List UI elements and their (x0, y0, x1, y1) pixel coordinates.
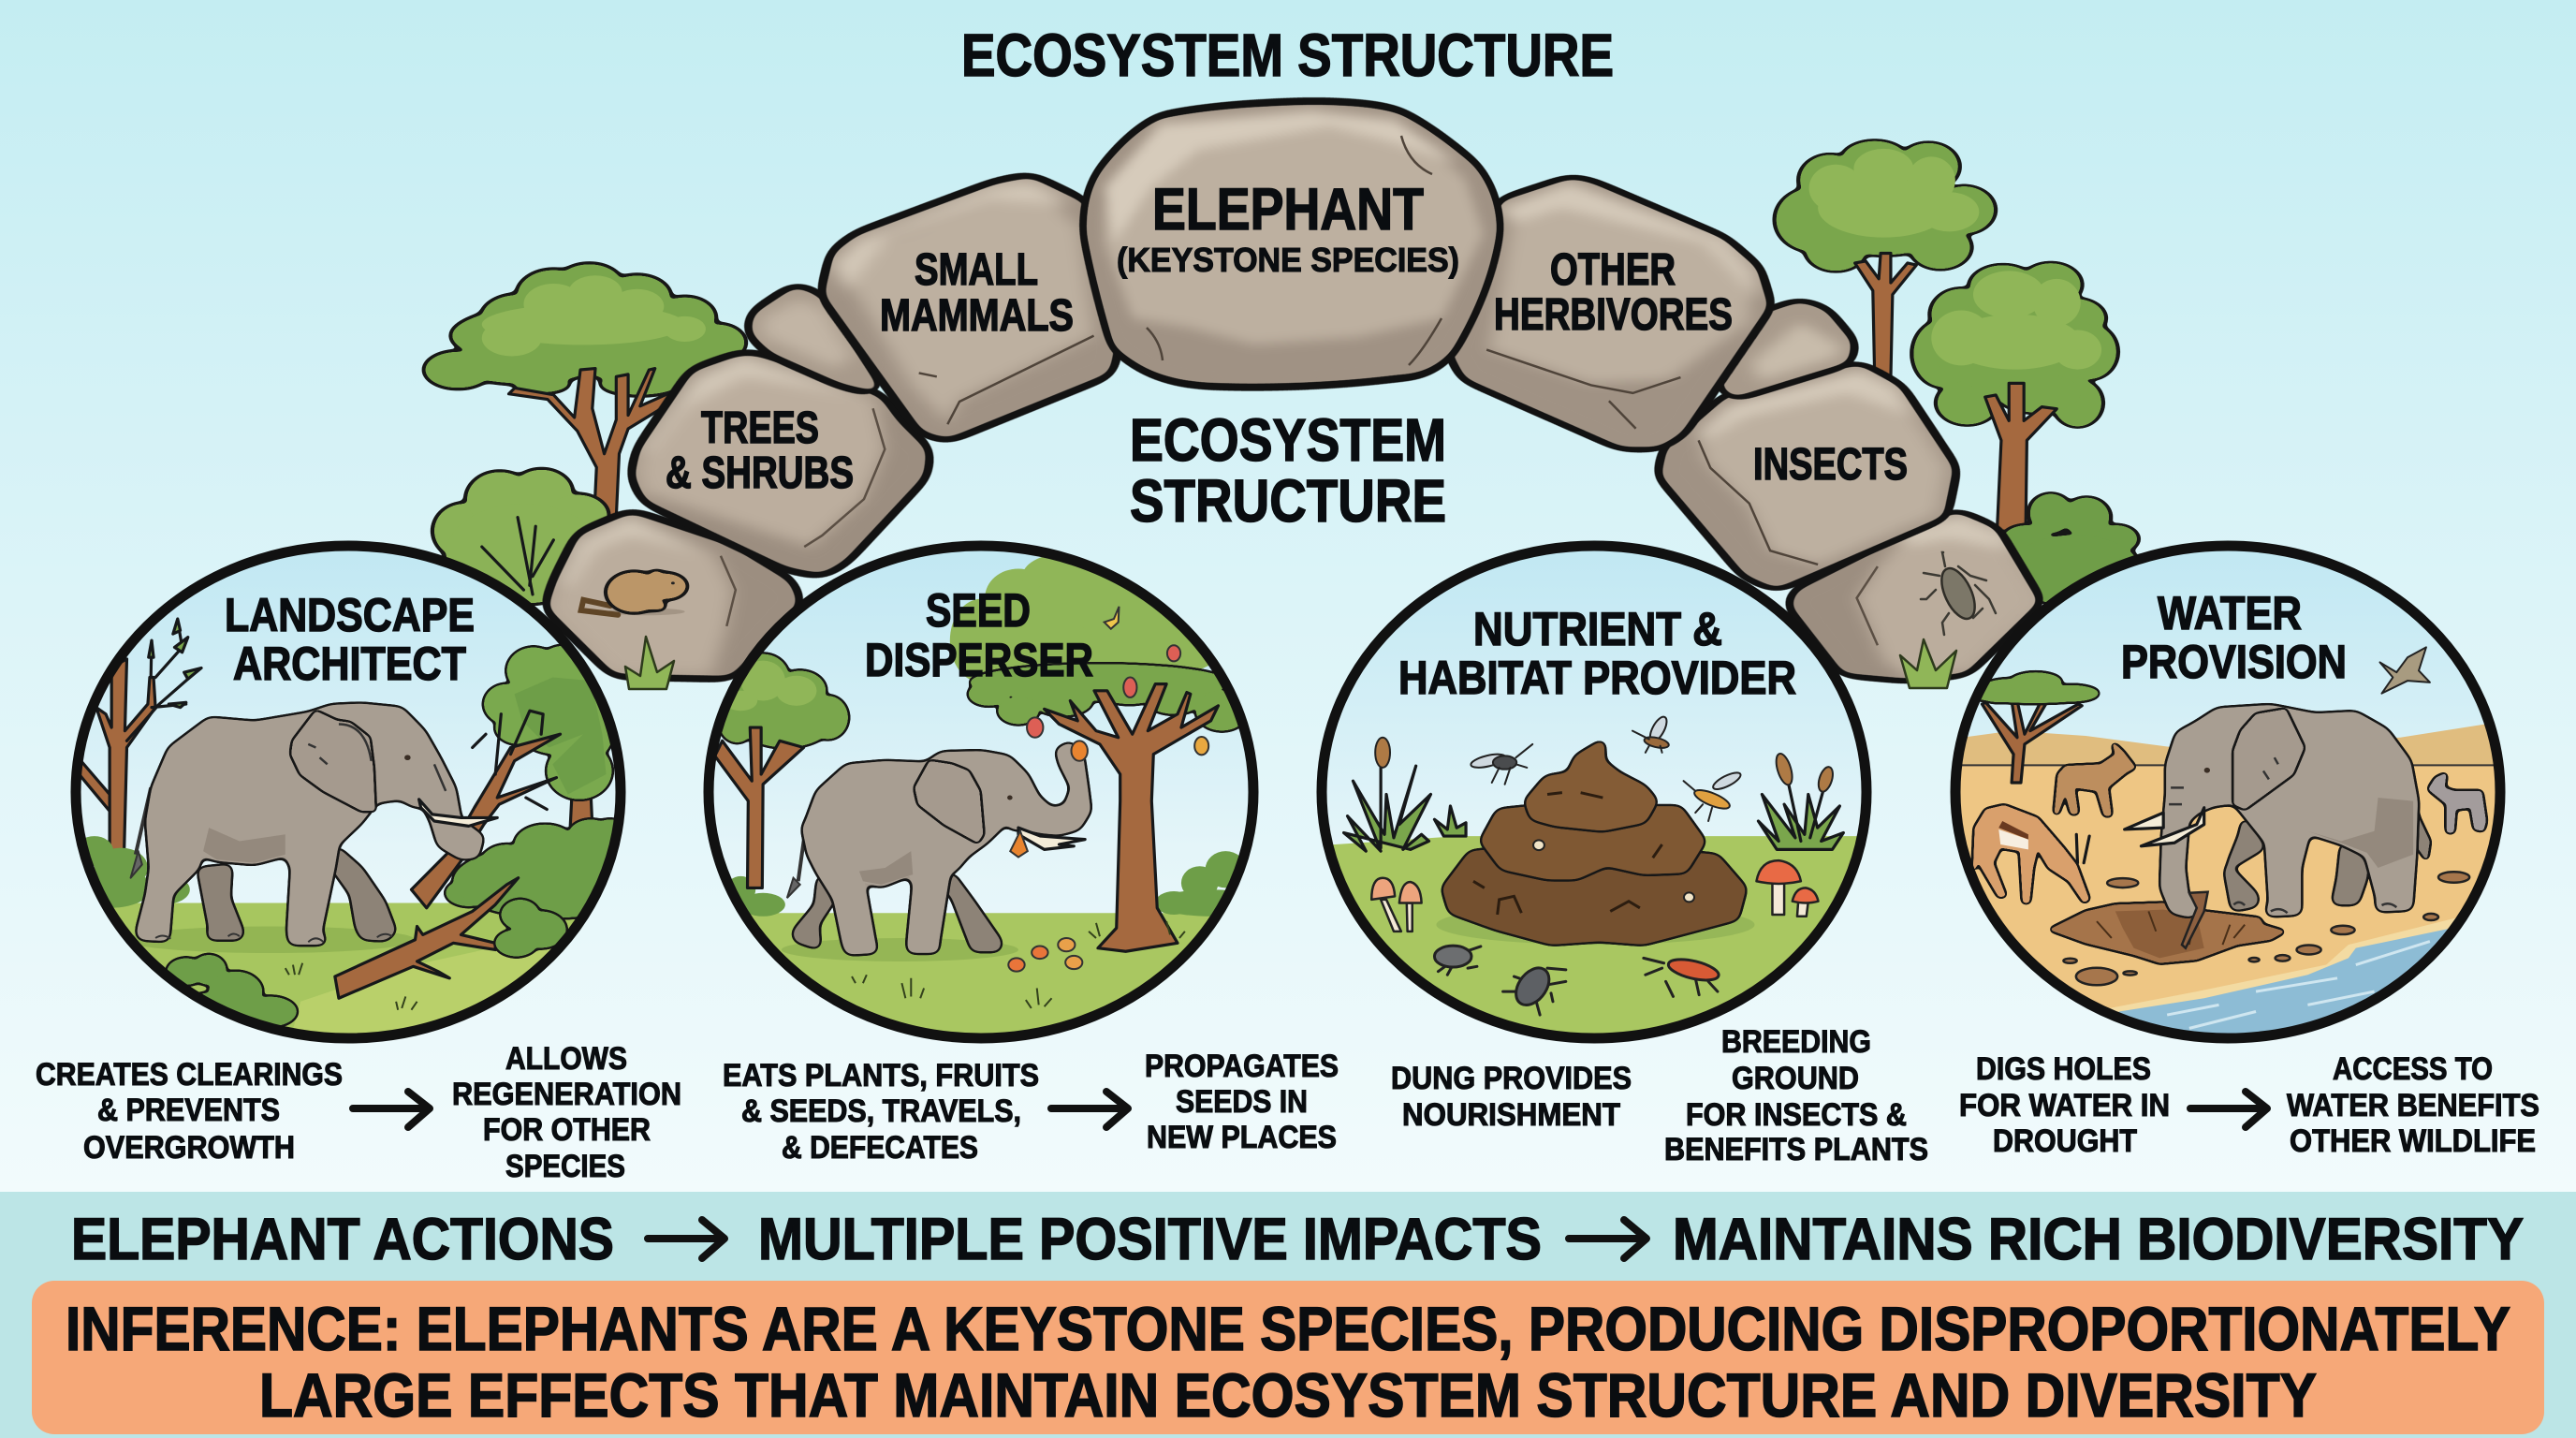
caption: allows regeneration (452, 1041, 681, 1184)
rock label: trees and shrubs: TREES (701, 404, 819, 453)
summary flow text: ELEPHANT ACTIONS (71, 1207, 614, 1272)
heading: water provision: WATER (2158, 587, 2302, 639)
ground (114, 902, 576, 1028)
heading: nutrient and habitat provider (1398, 603, 1796, 704)
arrow (1051, 1092, 1128, 1127)
caption: creates clearings: & PREVENTS (97, 1093, 280, 1128)
summary flow text: MULTIPLE POSITIVE IMPACTS (758, 1207, 1542, 1272)
ground (751, 913, 1210, 1034)
right pebble (1718, 300, 1855, 400)
caption: breeding ground (1664, 1024, 1928, 1167)
right shrubs (444, 817, 614, 919)
caption: eats plants: EATS PLANTS, FRUITS (723, 1058, 1039, 1093)
ground beetles (1434, 946, 1721, 1015)
caption: breeding ground: FOR INSECTS & (1686, 1097, 1907, 1133)
elephant (787, 741, 1090, 955)
caption: eats plants: & DEFECATES (782, 1130, 978, 1166)
grazing gazelle (1973, 805, 2089, 902)
grass blades (285, 963, 417, 1010)
heading: ecosystem structure under arch: ECOSYSTEM (1130, 406, 1446, 474)
caption: breeding ground: BREEDING (1721, 1024, 1871, 1060)
heading: landscape architect (225, 589, 475, 690)
left acacia tree (425, 264, 744, 518)
caption: allows regeneration: FOR OTHER (483, 1112, 651, 1148)
ground (1310, 836, 1891, 1058)
elephant (131, 703, 497, 945)
arrow (353, 1092, 430, 1127)
right trees and bush (1776, 141, 2141, 606)
summary flow text (71, 1207, 2524, 1272)
heading: water provision (2121, 587, 2347, 688)
sand (1938, 765, 2518, 1058)
left reeds (1344, 738, 1466, 851)
rock label: other herbivores: HERBIVORES (1494, 290, 1733, 340)
circle: water provision (1938, 534, 2518, 1058)
summary band (0, 1192, 2576, 1438)
heading: water provision: PROVISION (2121, 636, 2347, 688)
icon: beetle (1921, 552, 1996, 635)
grass tuft right (1900, 639, 1956, 688)
caption: breeding ground: GROUND (1732, 1061, 1859, 1096)
fallen fruit (1008, 938, 1082, 972)
left mushrooms (1371, 878, 1422, 932)
ring (1322, 546, 1866, 1038)
summary flow text: MAINTAINS RICH BIODIVERSITY (1673, 1207, 2524, 1272)
caption: creates clearings: CREATES CLEARINGS (36, 1057, 343, 1093)
heading: ecosystem structure under arch (1130, 406, 1446, 535)
dung pile (1442, 738, 1747, 945)
fallen log (335, 878, 566, 998)
inference box: LARGE EFFECTS THAT MAINTAIN ECOSYSTEM STRUCTURE AND DIVERSITY (259, 1360, 2317, 1430)
grey antelope (2428, 772, 2486, 833)
title: ECOSYSTEM STRUCTURE (961, 22, 1614, 89)
right bush (2003, 493, 2141, 606)
right foot rock with beetle (1788, 509, 2042, 681)
heading: landscape architect: ARCHITECT (233, 638, 466, 690)
caption: digs holes: DIGS HOLES (1976, 1051, 2151, 1087)
caption: dung provides (1391, 1061, 1632, 1133)
circle: landscape architect (71, 541, 625, 1043)
left trees and bush (425, 264, 744, 604)
bird (2380, 647, 2430, 694)
broken tree (411, 711, 561, 908)
caption: eats plants: & SEEDS, TRAVELS, (741, 1093, 1021, 1129)
heading: seed disperser: DISPERSER (865, 634, 1093, 686)
elephant (2125, 705, 2430, 948)
bottom shrub (167, 955, 297, 1032)
stone arch (545, 103, 2042, 689)
arrow (2190, 1092, 2267, 1127)
left pebble (748, 284, 888, 397)
caption: access to water: ACCESS TO (2333, 1051, 2493, 1087)
insects rock (1658, 362, 1956, 591)
circle: nutrient and habitat provider (1310, 534, 1891, 1058)
rock label: elephant (1117, 177, 1459, 279)
big fruit tree (950, 553, 1248, 951)
elephant keystone rock (1085, 103, 1499, 386)
icon: mouse (581, 571, 686, 615)
ring (1955, 546, 2500, 1038)
rock label: other herbivores (1494, 245, 1733, 340)
ring (76, 546, 621, 1038)
heading: nutrient and habitat provider: HABITAT PROVIDER (1398, 652, 1796, 704)
right upper tree (1776, 141, 1994, 377)
caption: propagates seeds: SEEDS IN (1176, 1084, 1308, 1120)
caption: digs holes: DROUGHT (1993, 1123, 2137, 1159)
fruit on branches (1027, 607, 1208, 755)
rock label: trees and shrubs: & SHRUBS (666, 448, 854, 498)
heading: nutrient and habitat provider: NUTRIENT & (1473, 603, 1722, 655)
caption: allows regeneration: ALLOWS (505, 1041, 627, 1077)
caption: digs holes (1959, 1051, 2170, 1159)
caption: dung provides: NOURISHMENT (1402, 1097, 1620, 1133)
rock label: other herbivores: OTHER (1550, 245, 1676, 295)
grass tuft left (625, 637, 674, 689)
rock label: trees and shrubs (666, 404, 854, 498)
other herbivores rock (1449, 176, 1771, 449)
caption: creates clearings: OVERGROWTH (83, 1130, 295, 1166)
stones (2063, 872, 2469, 985)
ring (709, 546, 1253, 1038)
rock label: small mammals: SMALL (915, 245, 1038, 295)
distant gazelle (2055, 741, 2136, 816)
right mushrooms (1756, 860, 1818, 917)
rock label: small mammals: MAMMALS (880, 291, 1074, 341)
caption: eats plants (723, 1058, 1039, 1166)
water hole (2049, 902, 2286, 963)
rock label: elephant: ELEPHANT (1152, 177, 1424, 242)
circle: seed disperser (693, 534, 1273, 1058)
water (2119, 918, 2518, 1058)
caption: propagates seeds: NEW PLACES (1147, 1120, 1337, 1155)
hills (1938, 724, 2518, 768)
caption: access to water: OTHER WILDLIFE (2290, 1123, 2536, 1159)
rock label: insects: INSECTS (1753, 440, 1908, 490)
left bush (86, 836, 190, 908)
acacia tree (1971, 672, 2099, 783)
caption: access to water: WATER BENEFITS (2287, 1088, 2539, 1123)
caption: breeding ground: BENEFITS PLANTS (1664, 1132, 1928, 1167)
bare tree (79, 619, 201, 851)
right lower tree (1913, 263, 2116, 531)
left foot rock with mouse (545, 510, 801, 679)
caption: creates clearings (36, 1057, 343, 1166)
caption: allows regeneration: SPECIES (505, 1149, 625, 1184)
heading: seed disperser (865, 584, 1093, 686)
flying insects (1470, 714, 1743, 821)
rock label: elephant: (KEYSTONE SPECIES) (1117, 241, 1459, 279)
heading: landscape architect: LANDSCAPE (225, 589, 475, 641)
small mammals rock (821, 175, 1118, 441)
inference box (32, 1281, 2544, 1434)
right reeds (1758, 752, 1843, 849)
heading: ecosystem structure under arch: STRUCTURE (1130, 467, 1446, 535)
caption: dung provides: DUNG PROVIDES (1391, 1061, 1632, 1096)
caption: allows regeneration: REGENERATION (452, 1077, 681, 1112)
rock label: small mammals (880, 245, 1074, 341)
caption: access to water (2287, 1051, 2539, 1159)
caption: digs holes: FOR WATER IN (1959, 1088, 2170, 1123)
left tree (715, 654, 848, 888)
trees and shrubs rock (631, 353, 929, 577)
caption: propagates seeds: PROPAGATES (1145, 1049, 1339, 1084)
big right tree (484, 646, 616, 834)
left bush (434, 470, 607, 604)
grass blades (852, 921, 1185, 1008)
heading: seed disperser: SEED (926, 584, 1031, 637)
bushes (726, 851, 1266, 917)
caption: propagates seeds (1145, 1049, 1339, 1155)
